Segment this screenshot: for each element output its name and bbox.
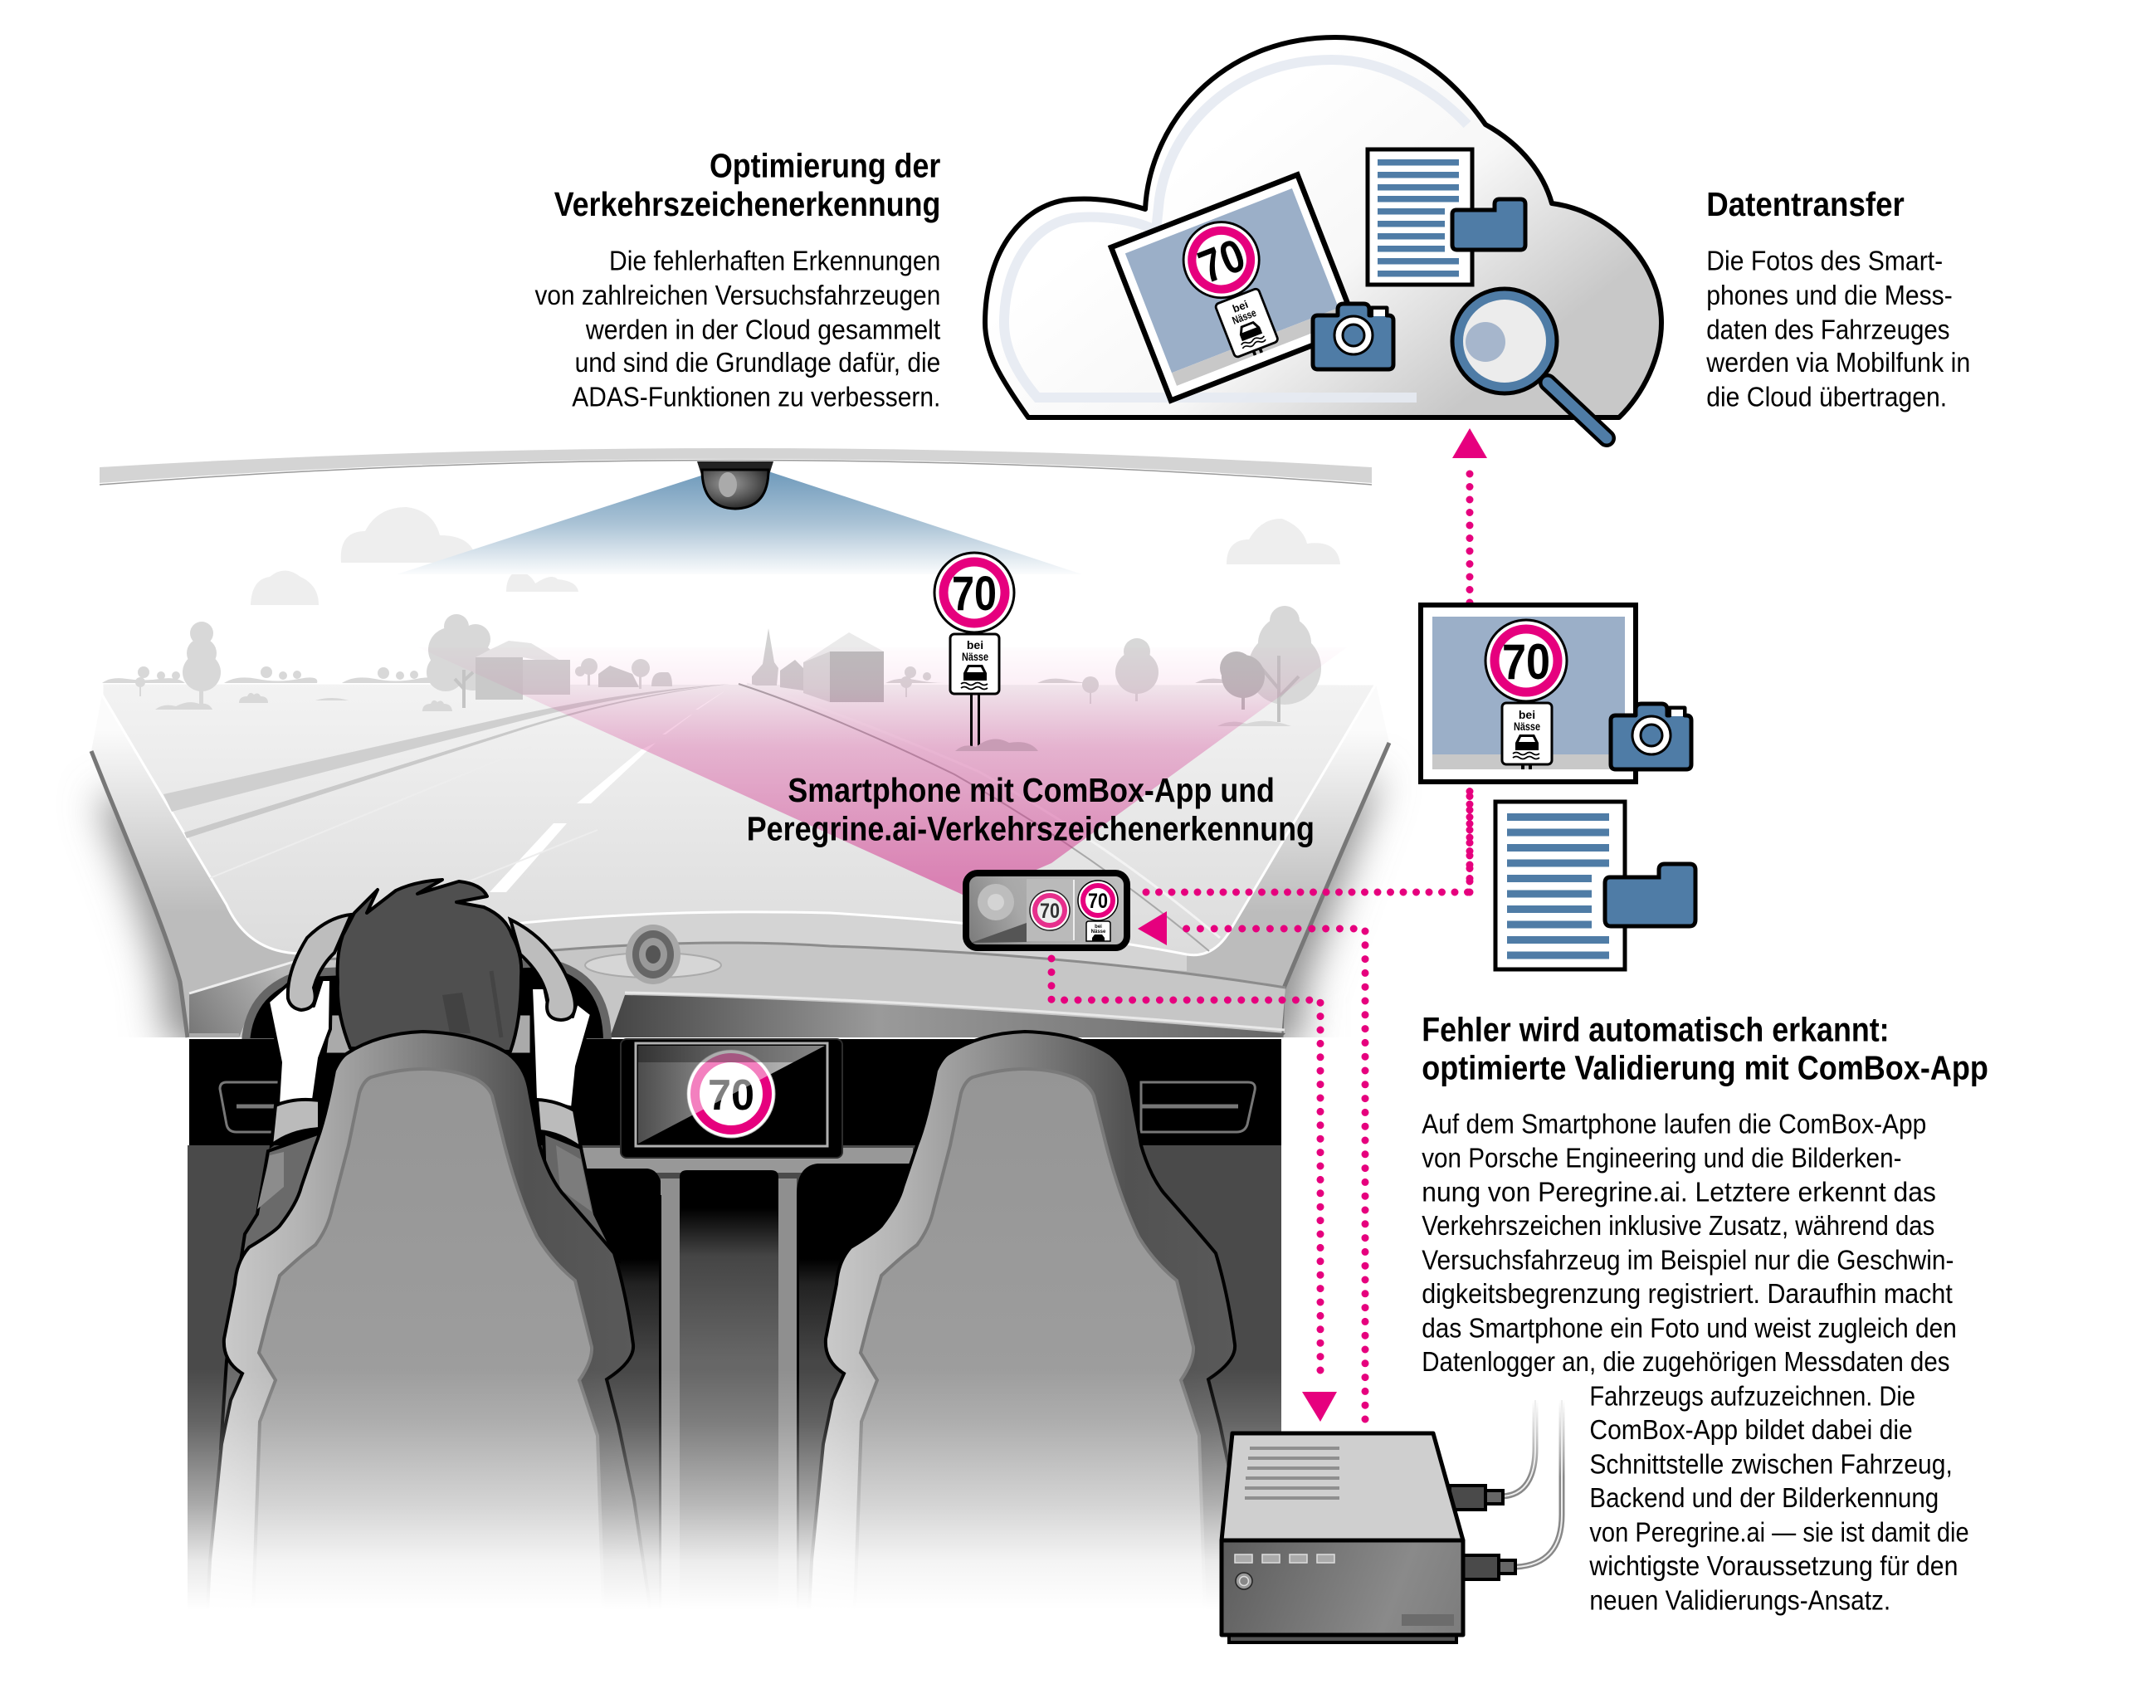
right cuff	[537, 1100, 581, 1148]
heading: Optimierung	[554, 147, 940, 223]
text: Fehler: wichtigste Voraussetzung für den	[1588, 1551, 1958, 1582]
left sleeve	[221, 1129, 332, 1448]
right hand	[531, 988, 592, 1108]
text: Fehler: Versuchsfahrzeug im Beispiel nur die Geschwin-	[1422, 1245, 1954, 1276]
heading: Fehler: optimierte Validierung mit ComBox-App	[1422, 1049, 1988, 1087]
driver	[221, 880, 618, 1448]
steering wheel rim right	[510, 920, 575, 1020]
left hand	[268, 979, 331, 1104]
text: Fehler: nung von Peregrine.ai. Letztere erkennt das	[1422, 1177, 1936, 1208]
photo in cloud: Nässe	[1231, 306, 1258, 327]
heading: Fehler: Fehler wird automatisch erkannt:	[1422, 1010, 1890, 1048]
photo in cloud: bei	[1231, 298, 1250, 315]
photo in cloud	[1111, 175, 1357, 401]
smartphone: 70	[1040, 900, 1060, 923]
dashboard	[189, 943, 1285, 1042]
text: Fehler: Backend und der Bilderkennung	[1589, 1483, 1939, 1514]
measurement document	[1495, 802, 1695, 969]
text: Fehler	[1422, 1109, 1969, 1616]
data logger	[1222, 1400, 1562, 1642]
console center	[680, 1170, 778, 1618]
text: Fehler: digkeitsbegrenzung registriert. Daraufhin macht	[1422, 1279, 1953, 1310]
road sign with speed limit: Nässe	[962, 650, 988, 663]
dark tree right	[1220, 651, 1265, 710]
detection cone	[418, 647, 1347, 898]
large photo of sign: 70	[1502, 634, 1550, 690]
buildings	[476, 628, 884, 702]
dash speaker	[626, 925, 680, 984]
photo in cloud: 70	[1191, 228, 1252, 293]
cables	[1503, 1400, 1535, 1496]
distant clouds	[251, 507, 1340, 605]
right vent	[1141, 1082, 1255, 1132]
hair	[338, 880, 521, 1052]
heading: Smartphone	[747, 771, 1315, 847]
heading: Fehler	[1422, 1010, 1988, 1087]
text: Fehler: Schnittstelle zwischen Fahrzeug,	[1589, 1449, 1953, 1480]
text: Datentransfer: Die Fotos des Smart-	[1706, 246, 1943, 277]
data document in cloud	[1368, 149, 1525, 285]
smartphone: bei	[1095, 925, 1102, 930]
wheel spokes	[325, 1014, 355, 1054]
camera icon	[1611, 704, 1691, 769]
dash dome	[585, 953, 721, 978]
text: Fehler: Verkehrszeichen inklusive Zusatz, während das	[1422, 1211, 1934, 1242]
heading: Datentransfer: Datentransfer	[1706, 185, 1905, 223]
driver seat	[207, 1032, 651, 1611]
smartphone: 70	[1088, 890, 1108, 913]
dotted arrow: logger to smartphone	[1138, 911, 1365, 1419]
smartphone: Nässe	[1091, 930, 1106, 935]
lid	[1222, 1433, 1463, 1540]
landscape	[102, 606, 1321, 726]
console right block	[797, 1164, 913, 1618]
text: Datentransfer: phones und die Mess-	[1706, 281, 1953, 311]
text: Optimierung: und sind die Grundlage dafür, die	[575, 348, 940, 378]
text: Optimierung: von zahlreichen Versuchsfahrzeugen	[535, 281, 940, 311]
large photo of sign: Nässe	[1514, 720, 1540, 733]
smartphone	[966, 873, 1127, 948]
magnifying glass	[1452, 289, 1607, 438]
text: Fehler: Auf dem Smartphone laufen die ComBox-App	[1422, 1109, 1926, 1139]
steering wheel rim left	[288, 915, 351, 1010]
connectors	[1450, 1486, 1485, 1510]
text: Optimierung: ADAS-Funktionen zu verbessern.	[572, 383, 940, 413]
text: Fehler: das Smartphone ein Foto und weist zugleich den	[1422, 1313, 1957, 1344]
camera view cone	[397, 471, 1082, 574]
roof edge	[100, 448, 1372, 485]
text: Datentransfer	[1705, 246, 1970, 413]
text: Datentransfer: die Cloud übertragen.	[1706, 383, 1947, 413]
center display	[621, 1039, 842, 1158]
cloud	[985, 37, 1661, 417]
road markings	[163, 684, 1220, 951]
heading: Smartphone: Smartphone mit ComBox-App und	[788, 771, 1275, 809]
road sign with speed limit	[934, 553, 1038, 751]
heading: Optimierung: Optimierung der	[710, 147, 940, 185]
heading: Optimierung: Verkehrszeichenerkennung	[554, 185, 940, 223]
dotted arrow: data to cloud	[1146, 428, 1487, 892]
text: Fehler: von Porsche Engineering und die Bilderken-	[1422, 1144, 1901, 1174]
ground	[102, 683, 1376, 955]
text layer	[535, 147, 1988, 1616]
front	[1222, 1540, 1463, 1635]
road sign with speed limit: 70	[952, 567, 997, 621]
text: Optimierung	[535, 246, 941, 413]
text: Fehler: Datenlogger an, die zugehörigen Messdaten des	[1422, 1347, 1949, 1378]
passenger seat	[809, 1032, 1252, 1611]
right sleeve	[544, 1133, 618, 1261]
lower interior panel	[188, 1039, 1281, 1618]
text: Datentransfer: daten des Fahrzeuges	[1706, 315, 1949, 345]
windshield frame and pillars	[91, 684, 1389, 1079]
road sign with speed limit: bei	[967, 638, 983, 651]
text: Optimierung: Die fehlerhaften Erkennungen	[609, 246, 940, 277]
text: Optimierung: werden in der Cloud gesammelt	[585, 315, 941, 345]
center console band	[581, 1148, 913, 1173]
text: Fehler: von Peregrine.ai — sie ist damit die	[1589, 1517, 1969, 1548]
text: Fehler: ComBox-App bildet dabei die	[1589, 1415, 1913, 1446]
camera icon in cloud	[1313, 304, 1393, 369]
foot	[1229, 1635, 1456, 1642]
left vent	[220, 1082, 282, 1132]
text: Fehler: Fahrzeugs aufzuzeichnen. Die	[1589, 1381, 1915, 1412]
steering cowl	[246, 963, 607, 1042]
interior camera	[697, 461, 773, 509]
console left block	[581, 1169, 662, 1618]
text: Datentransfer: werden via Mobilfunk in	[1705, 348, 1970, 378]
center display: 70	[708, 1071, 754, 1120]
heading: Smartphone: Peregrine.ai-Verkehrszeichenerkennung	[747, 809, 1315, 847]
dotted arrow: smartphone to logger	[1051, 959, 1337, 1422]
left cuff	[271, 1100, 319, 1145]
large photo of sign	[1421, 605, 1636, 782]
large photo of sign: bei	[1519, 708, 1535, 721]
text: Fehler: neuen Validierungs-Ansatz.	[1589, 1585, 1890, 1616]
